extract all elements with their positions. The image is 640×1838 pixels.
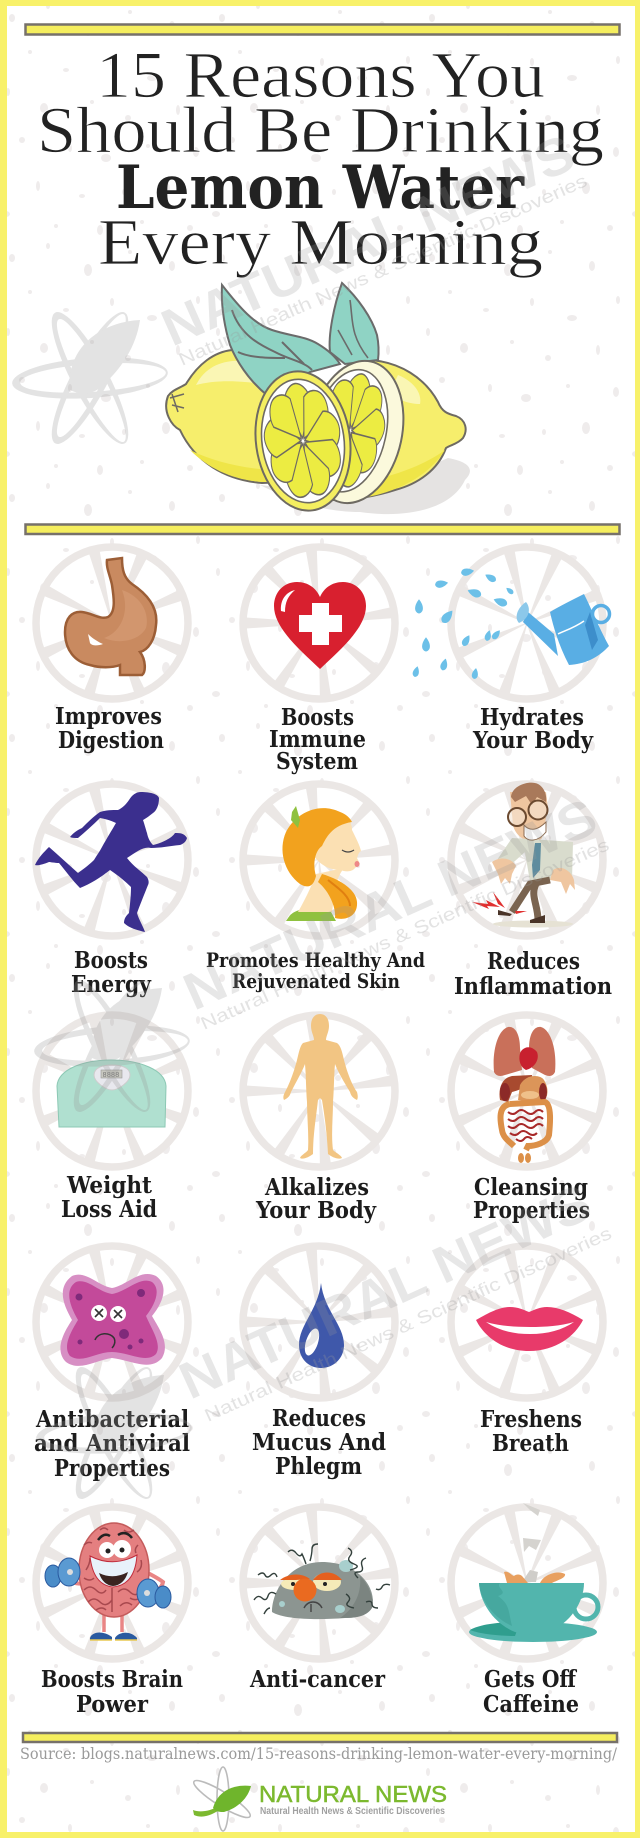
icon: internal organs bbox=[494, 1027, 555, 1163]
wheel bbox=[243, 784, 395, 936]
watermark: lower: NATURAL NEWS bbox=[171, 1174, 600, 1411]
wheel bbox=[36, 784, 188, 936]
logo tagline: Natural Health News & Scientific Discoveries bbox=[260, 1805, 445, 1817]
rear slice bbox=[296, 352, 416, 512]
drops bbox=[412, 567, 515, 679]
label bbox=[454, 948, 612, 1000]
panel: boosts immune system bbox=[243, 547, 395, 775]
icon: lemons and leaves bbox=[166, 283, 470, 517]
middle bar bbox=[26, 524, 620, 534]
label: Promotes Healthy And bbox=[206, 948, 425, 972]
wheel bbox=[451, 1015, 603, 1167]
label: Your Body bbox=[255, 1197, 377, 1224]
leaf right bbox=[330, 283, 379, 364]
label: System bbox=[276, 748, 358, 775]
wheel bbox=[36, 1246, 188, 1398]
label: Your Body bbox=[472, 727, 594, 754]
watermark: middle bbox=[33, 788, 612, 1120]
watermark: top bbox=[11, 124, 590, 452]
logo: Natural News bbox=[190, 1767, 447, 1831]
label: Boosts bbox=[74, 947, 148, 974]
label: Phlegm bbox=[275, 1453, 362, 1480]
icon: stomach bbox=[65, 558, 156, 675]
panel: hydrates your body bbox=[412, 547, 610, 754]
wheel bbox=[451, 784, 603, 936]
panel: improves digestion bbox=[36, 547, 188, 754]
panel: alkalizes your body bbox=[243, 1014, 395, 1224]
wheel bbox=[451, 1246, 603, 1398]
wheel bbox=[243, 1507, 395, 1659]
wheel bbox=[243, 1015, 395, 1167]
label: Hydrates bbox=[480, 704, 584, 731]
title: Every Morning bbox=[98, 206, 543, 279]
panel: anti-cancer bbox=[243, 1507, 395, 1693]
panel: freshens breath bbox=[451, 1246, 603, 1457]
label bbox=[480, 1406, 582, 1457]
highlight bbox=[196, 361, 312, 398]
label bbox=[483, 1666, 579, 1718]
label: Immune bbox=[269, 726, 366, 753]
icon: human body bbox=[283, 1014, 358, 1159]
wheel bbox=[243, 1246, 395, 1398]
label bbox=[34, 1406, 190, 1482]
wheel bbox=[36, 1015, 188, 1167]
watermark: middle: NATURAL NEWS bbox=[175, 788, 605, 1022]
leaf right veins bbox=[338, 300, 368, 358]
icon: purple microbe bbox=[60, 1274, 165, 1366]
label: Cleansing bbox=[474, 1174, 588, 1201]
label: Properties bbox=[473, 1197, 590, 1224]
icon: brain with dumbbells bbox=[45, 1523, 171, 1640]
panel: boosts brain power bbox=[36, 1507, 188, 1718]
panel: promotes healthy skin bbox=[206, 784, 425, 993]
icon: bathroom scale: 8888 bbox=[102, 1072, 119, 1080]
label: Reduces bbox=[487, 948, 580, 975]
label bbox=[473, 1174, 590, 1224]
watermark: lower: Natural Health News & Scientific Discoveries bbox=[201, 1223, 615, 1426]
label bbox=[206, 948, 425, 993]
label: Freshens bbox=[480, 1406, 582, 1433]
label: Improves bbox=[55, 703, 162, 730]
label: Power bbox=[76, 1691, 149, 1718]
front slice bbox=[247, 365, 359, 517]
title bbox=[37, 39, 604, 279]
label: and Antiviral bbox=[34, 1430, 190, 1457]
icon: running silhouette bbox=[35, 792, 187, 932]
icon: woman with orange hair bbox=[282, 806, 361, 921]
bottom shade left bbox=[190, 450, 300, 482]
shadow bbox=[260, 458, 470, 514]
wheel bbox=[451, 1507, 603, 1659]
wheel bbox=[451, 547, 603, 699]
label: Reduces bbox=[272, 1405, 366, 1432]
top bar bbox=[26, 24, 620, 34]
label: Loss Aid bbox=[61, 1196, 157, 1223]
icon: grumpy cancer cell bbox=[254, 1544, 390, 1619]
leaf veins bbox=[232, 310, 312, 370]
icon: bathroom scale bbox=[57, 1060, 166, 1127]
panel: gets off caffeine bbox=[451, 1503, 603, 1718]
panel: boosts energy bbox=[35, 784, 188, 998]
logo atom icon bbox=[190, 1767, 254, 1831]
label: Breath bbox=[492, 1430, 569, 1457]
icon: blue drop bbox=[299, 1283, 344, 1368]
panel: reduces mucus and phlegm bbox=[243, 1246, 395, 1480]
label: Boosts bbox=[281, 704, 354, 731]
label: Rejuvenated Skin bbox=[232, 969, 400, 993]
label: Caffeine bbox=[483, 1691, 579, 1718]
watermark: middle: Natural Health News & Scientific Discoveries bbox=[197, 834, 612, 1034]
label bbox=[252, 1405, 386, 1480]
watermark: top: NATURAL NEWS bbox=[153, 124, 583, 358]
label bbox=[472, 704, 594, 754]
panel: reduces inflammation bbox=[451, 783, 612, 1000]
bottom shade right bbox=[360, 450, 445, 498]
title: Should Be Drinking bbox=[37, 94, 604, 167]
leaf left bbox=[222, 285, 340, 396]
right highlight bbox=[390, 375, 420, 404]
logo wordmark: NATURAL NEWS bbox=[259, 1781, 447, 1807]
stem mark bbox=[170, 394, 184, 412]
icon: teal coffee cup bbox=[469, 1503, 598, 1642]
label: Inflammation bbox=[454, 973, 612, 1000]
label bbox=[55, 703, 164, 754]
label: Energy bbox=[71, 971, 152, 998]
label bbox=[61, 1172, 157, 1223]
icon: heart with cross bbox=[274, 582, 366, 669]
label: Digestion bbox=[58, 727, 164, 754]
label: Antibacterial bbox=[35, 1406, 189, 1433]
right lemon bbox=[320, 360, 466, 500]
title: 15 Reasons You bbox=[96, 39, 545, 112]
bottom bar bbox=[23, 1733, 617, 1742]
label: Properties bbox=[54, 1455, 170, 1482]
watermark: lower bbox=[35, 1174, 615, 1507]
label: Mucus And bbox=[252, 1429, 386, 1456]
label bbox=[41, 1666, 183, 1718]
label: Anti-cancer bbox=[249, 1666, 386, 1693]
icon: man in pain bbox=[472, 783, 575, 928]
title: Lemon Water bbox=[116, 153, 525, 223]
icon: watering can with drops bbox=[412, 567, 610, 679]
left lemon bbox=[166, 349, 340, 483]
label: Boosts Brain bbox=[41, 1666, 183, 1693]
watermark: top: Natural Health News & Scientific Discoveries bbox=[175, 170, 590, 370]
label bbox=[71, 947, 152, 998]
label bbox=[255, 1174, 377, 1224]
panel: weight loss aid bbox=[36, 1015, 188, 1223]
wheel bbox=[36, 1507, 188, 1659]
wheel bbox=[243, 547, 395, 699]
label: Weight bbox=[66, 1172, 152, 1199]
panel: cleansing properties bbox=[451, 1015, 603, 1224]
label: Gets Off bbox=[484, 1666, 578, 1693]
label bbox=[269, 704, 366, 775]
wheel bbox=[36, 547, 188, 699]
icon: lips bbox=[476, 1307, 583, 1351]
label: Alkalizes bbox=[264, 1174, 369, 1201]
panel: antibacterial and antiviral bbox=[34, 1246, 190, 1482]
